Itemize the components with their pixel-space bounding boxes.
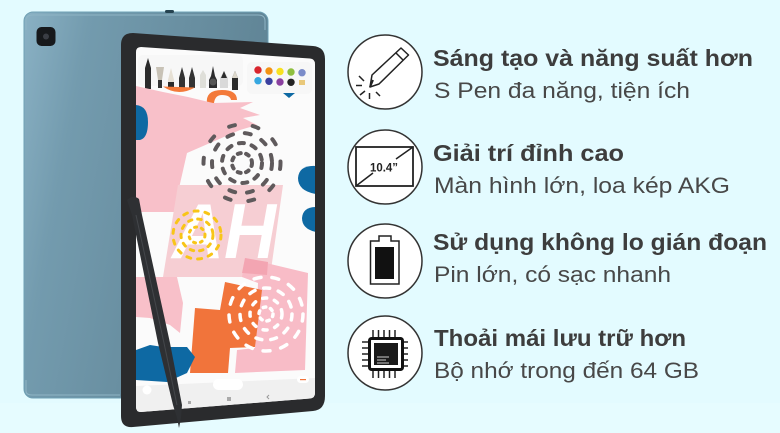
feature 3: battery	[348, 224, 767, 298]
S Pen	[127, 197, 182, 428]
heading: Sáng tạo và năng suất hơn	[433, 45, 753, 71]
icon: 10.4 inch screen	[348, 130, 422, 204]
orange blocks	[190, 282, 262, 373]
colour palette	[254, 66, 306, 86]
subtext: Màn hình lớn, loa kép AKG	[434, 173, 730, 198]
AH watermark: AH	[170, 187, 278, 275]
blue wave	[136, 345, 195, 382]
icon: pen	[348, 35, 422, 109]
camera	[36, 27, 56, 46]
orange shapes top	[163, 86, 195, 92]
front tablet with S Pen	[121, 33, 325, 428]
pink brush stroke	[136, 86, 260, 212]
heading: Giải trí đỉnh cao	[433, 140, 624, 166]
blue shapes	[136, 105, 148, 140]
feature 2: entertainment	[348, 130, 730, 204]
white dashed rings	[229, 277, 303, 351]
icon: chip	[348, 316, 422, 390]
translucent AH block	[163, 185, 283, 277]
feature 4: storage	[348, 316, 699, 390]
icon: battery	[348, 224, 422, 298]
grey dashed rings	[204, 124, 280, 202]
toolbar: pens	[145, 58, 238, 90]
bottom navigation bar	[136, 378, 315, 412]
back of tablet	[24, 10, 268, 398]
feature 1: creativity	[348, 35, 753, 109]
yellow dashed rings	[173, 211, 221, 259]
subtext: Pin lớn, có sạc nhanh	[434, 262, 671, 287]
heading: Sử dụng không lo gián đoạn	[433, 229, 767, 255]
icon: 10.4 inch screen: 10.4”	[370, 160, 398, 174]
subtext: Bộ nhớ trong đến 64 GB	[434, 358, 699, 383]
tablet bezel	[121, 33, 325, 427]
subtext: S Pen đa năng, tiện ích	[434, 78, 690, 103]
heading: Thoải mái lưu trữ hơn	[434, 325, 686, 351]
tablet screen artwork	[136, 47, 316, 414]
pink lower blocks	[136, 277, 183, 333]
